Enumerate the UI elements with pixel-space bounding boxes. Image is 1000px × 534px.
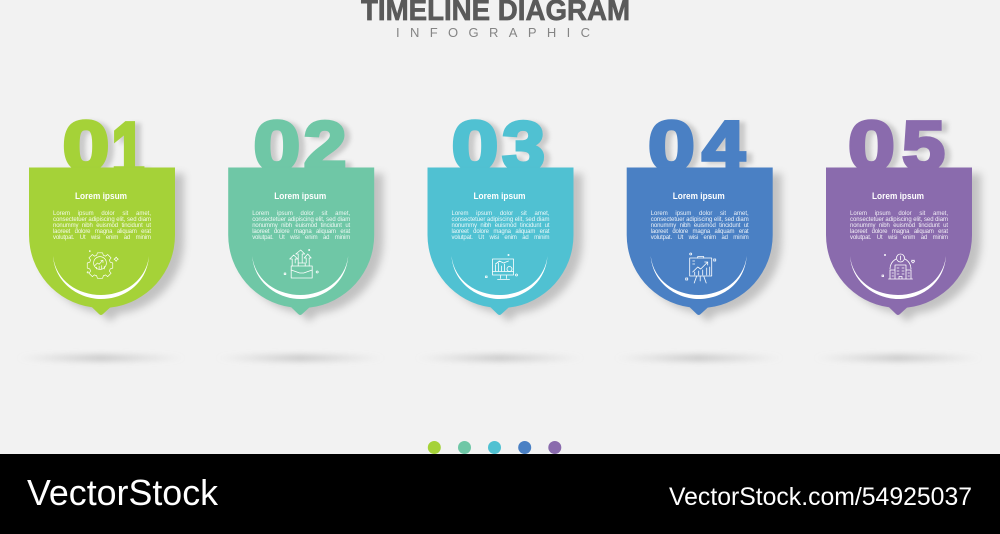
icon: briefcase with arrows — [284, 249, 318, 278]
body text: Lorem ipsum dolor sit amet, — [651, 211, 749, 217]
number 04: 0 — [648, 108, 695, 185]
body text: consectetuer adipiscing elit, sed diam — [252, 217, 350, 223]
number shadow: 1 — [117, 109, 151, 195]
icon: building with coin — [882, 254, 914, 279]
body text: Lorem ipsum dolor sit amet, — [452, 211, 550, 217]
smile arc — [850, 256, 946, 299]
card body — [29, 168, 175, 315]
body text: nonummy nibh euismod tincidunt ut — [452, 223, 550, 229]
heading: Lorem ipsum — [673, 191, 725, 201]
body text: Lorem ipsum dolor sit amet, — [850, 211, 948, 217]
body text: volutpat. Ut wisi enim ad minim — [53, 235, 151, 241]
body text: Lorem ipsum dolor sit amet, — [53, 211, 151, 217]
body text: consectetuer adipiscing elit, sed diam — [452, 217, 550, 223]
body text: laoreet dolore magna aliquam erat — [651, 229, 749, 235]
card shadow — [436, 174, 582, 321]
number 02: 0 — [253, 108, 300, 185]
ground shadow — [614, 354, 784, 362]
card body — [826, 168, 972, 315]
footer bar — [0, 454, 1000, 534]
smile arc — [452, 256, 548, 299]
body text — [252, 211, 351, 241]
number shadow — [259, 108, 352, 187]
panel: step 05 — [813, 106, 983, 362]
ground shadow — [813, 354, 983, 362]
card body — [627, 168, 773, 315]
number shadow: 0 — [654, 110, 701, 187]
heading: Lorem ipsum — [872, 191, 924, 201]
footer url: VectorStock.com/54925037 — [669, 483, 972, 511]
body text: laoreet dolore magna aliquam erat — [850, 229, 948, 235]
number shadow — [854, 108, 951, 187]
body text: volutpat. Ut wisi enim ad minim — [452, 235, 550, 241]
number shadow: 2 — [310, 108, 352, 187]
number shadow: 4 — [708, 108, 751, 187]
number 04: 4 — [702, 106, 745, 185]
body text: nonummy nibh euismod tincidunt ut — [252, 223, 351, 229]
number 02 — [253, 106, 346, 185]
ground shadow — [215, 354, 385, 362]
number shadow: 0 — [854, 110, 901, 187]
body text: laoreet dolore magna aliquam erat — [452, 229, 550, 235]
panel: step 02 — [215, 106, 385, 362]
body text: volutpat. Ut wisi enim ad minim — [651, 235, 749, 241]
body text: Lorem ipsum dolor sit amet, — [252, 211, 351, 217]
card shadow — [237, 174, 383, 321]
ground shadow — [16, 354, 186, 362]
number 03: 0 — [452, 108, 498, 185]
number shadow — [69, 109, 151, 195]
number shadow: 0 — [458, 110, 504, 187]
smile arc — [53, 256, 149, 299]
ground shadow — [414, 354, 584, 362]
body text: consectetuer adipiscing elit, sed diam — [53, 217, 151, 223]
card shadow — [636, 174, 782, 321]
body text — [651, 211, 749, 241]
card body — [228, 168, 374, 315]
body text: laoreet dolore magna aliquam erat — [53, 229, 151, 235]
body text: nonummy nibh euismod tincidunt ut — [53, 223, 151, 229]
number 03 — [452, 106, 545, 185]
smile arc — [252, 256, 348, 299]
number 01: 1 — [111, 107, 145, 193]
panel: step 03 — [414, 106, 584, 362]
body text: nonummy nibh euismod tincidunt ut — [850, 223, 948, 229]
number shadow — [458, 108, 551, 187]
card shadow — [38, 174, 184, 321]
body text: consectetuer adipiscing elit, sed diam — [850, 217, 948, 223]
smile arc — [651, 256, 747, 299]
body text: nonummy nibh euismod tincidunt ut — [651, 223, 749, 229]
heading: Lorem ipsum — [474, 191, 526, 201]
body text: laoreet dolore magna aliquam erat — [252, 229, 351, 235]
heading: Lorem ipsum — [75, 191, 127, 201]
number 05: 5 — [902, 106, 945, 185]
card body — [428, 168, 574, 315]
number 02: 2 — [304, 106, 346, 185]
body text: volutpat. Ut wisi enim ad minim — [252, 235, 350, 241]
number shadow — [654, 108, 751, 187]
number 01: 0 — [63, 108, 109, 185]
number 05 — [848, 106, 945, 185]
footer brand: VectorStock — [27, 472, 219, 513]
panel: step 04 — [614, 106, 784, 362]
number 04 — [648, 106, 745, 185]
number shadow: 0 — [259, 110, 306, 187]
body text — [53, 211, 151, 241]
number 03: 3 — [502, 106, 545, 185]
body text — [452, 211, 550, 241]
icon: gear with chart — [87, 251, 118, 278]
body text: volutpat. Ut wisi enim ad minim — [850, 235, 948, 241]
body text — [850, 211, 948, 241]
panel: step 01 — [16, 107, 186, 362]
subtitle: INFOGRAPHIC — [396, 25, 590, 40]
number 05: 0 — [848, 108, 895, 185]
pagination dots — [428, 441, 561, 454]
number shadow: 0 — [69, 110, 115, 187]
number 01 — [63, 107, 145, 193]
heading: Lorem ipsum — [274, 191, 326, 201]
icon: presentation board — [686, 253, 716, 283]
number shadow: 5 — [908, 108, 951, 187]
body text: consectetuer adipiscing elit, sed diam — [651, 217, 749, 223]
card shadow — [835, 174, 981, 321]
number shadow: 3 — [508, 108, 551, 187]
icon: monitor with chart — [486, 254, 518, 280]
